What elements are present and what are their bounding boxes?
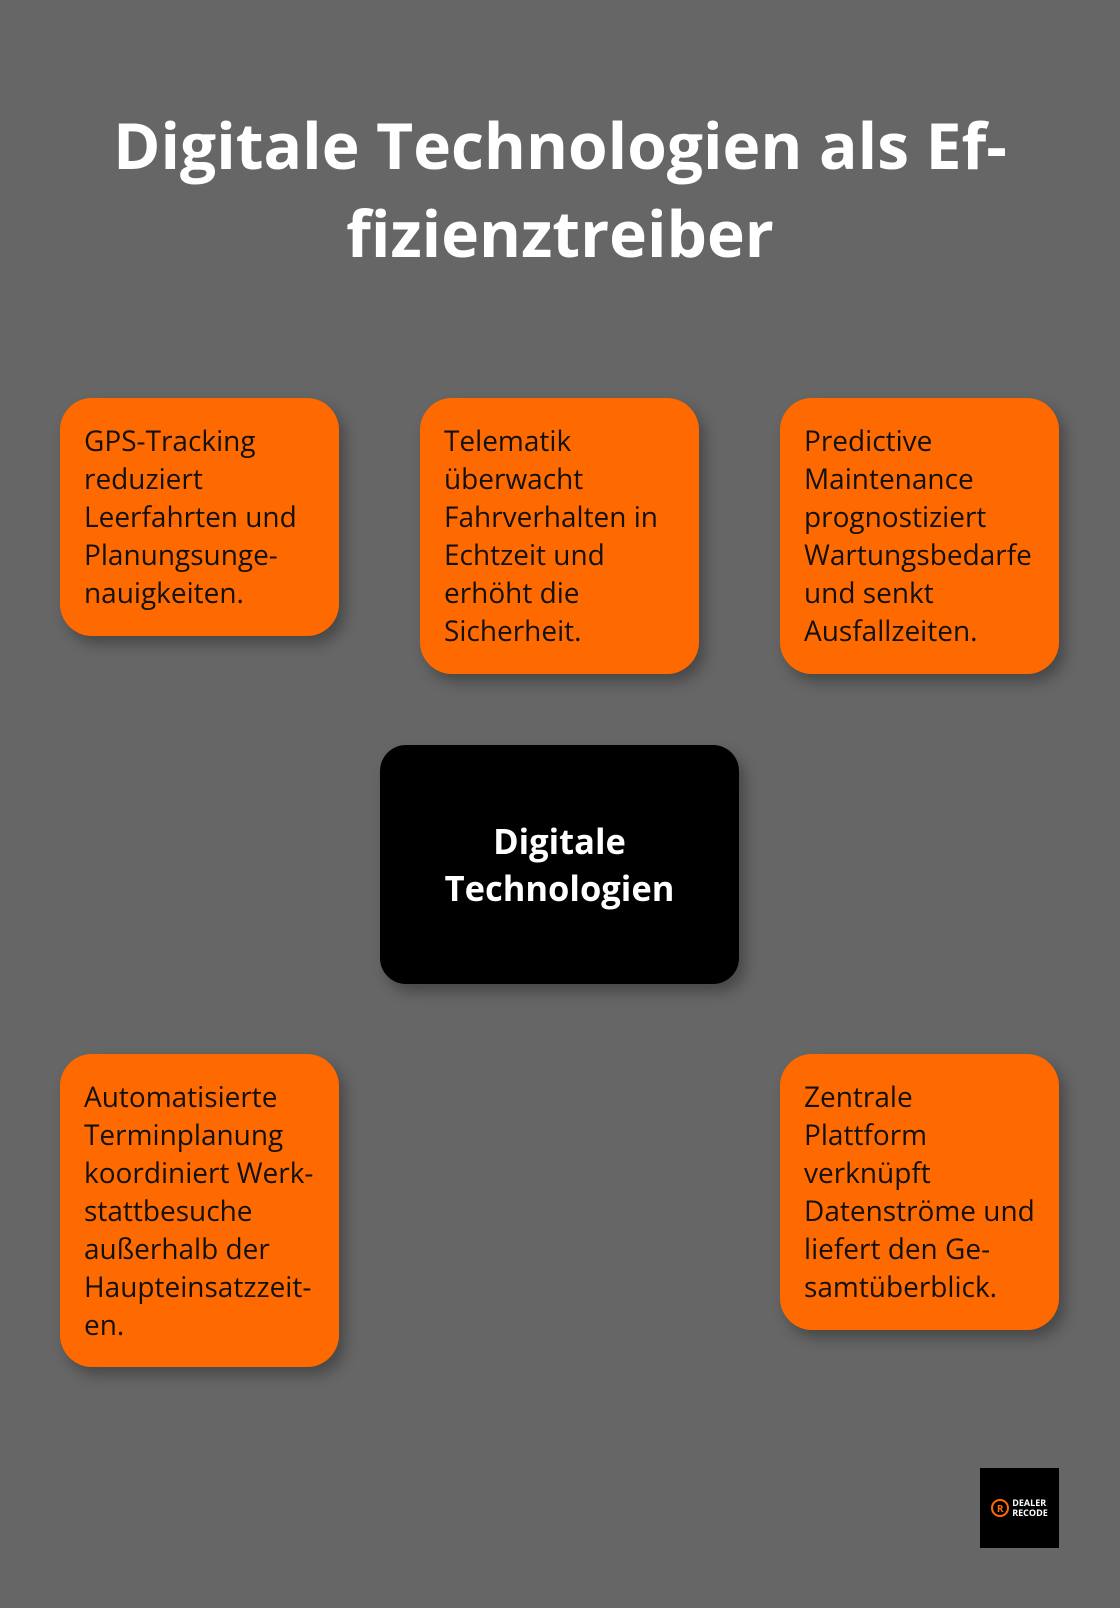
panel: Terminplanung: außerhalb der: [84, 1230, 270, 1268]
panel: Zentrale Plattform: samtüberblick.: [804, 1268, 997, 1306]
center hub: [380, 745, 739, 984]
center hub: Technologien: [445, 864, 674, 912]
panel: Telematik: Telematik: [444, 422, 571, 460]
panel: Terminplanung: stattbesuche: [84, 1192, 253, 1230]
panel: Terminplanung: Terminplanung: [84, 1116, 283, 1154]
panel: Predictive Maintenance: [780, 398, 1059, 674]
panel: Telematik: erhöht die: [444, 574, 580, 612]
logo: RECODE: [1012, 1506, 1048, 1519]
panel: Zentrale Plattform: [780, 1054, 1059, 1330]
panel: GPS-Tracking: reduziert: [84, 460, 203, 498]
panel: Zentrale Plattform: Plattform: [804, 1116, 927, 1154]
panel: Telematik: überwacht: [444, 460, 583, 498]
panel: Zentrale Plattform: Zentrale: [804, 1078, 913, 1116]
panel: Zentrale Plattform: Datenströme und: [804, 1192, 1035, 1230]
panel: Predictive Maintenance: prognostiziert: [804, 498, 986, 536]
panel: Zentrale Plattform: verknüpft: [804, 1154, 931, 1192]
title: fizienztreiber: [346, 189, 774, 276]
panel: Terminplanung: Haupteinsatzzeit-: [84, 1268, 311, 1306]
title: Digitale Technologien als Ef-: [113, 101, 1007, 188]
panel: Terminplanung: koordiniert Werk-: [84, 1154, 313, 1192]
panel: GPS-Tracking: Planungsunge-: [84, 536, 278, 574]
title: [113, 101, 1007, 276]
panel: GPS-Tracking: Leerfahrten und: [84, 498, 297, 536]
panel: Predictive Maintenance: Wartungsbedarfe: [804, 536, 1032, 574]
panel: GPS-Tracking: nauigkeiten.: [84, 574, 244, 612]
panel: Telematik: Sicherheit.: [444, 612, 581, 650]
panel: Telematik: Fahrverhalten in: [444, 498, 658, 536]
panel: Terminplanung: Automatisierte: [84, 1078, 278, 1116]
panel: Terminplanung: en.: [84, 1306, 124, 1344]
panel: Telematik: Echtzeit und: [444, 536, 605, 574]
panel: Predictive Maintenance: und senkt: [804, 574, 934, 612]
panel: GPS-Tracking: [60, 398, 339, 636]
panel: Telematik: [420, 398, 699, 674]
panel: Predictive Maintenance: Ausfallzeiten.: [804, 612, 977, 650]
panel: Predictive Maintenance: Maintenance: [804, 460, 974, 498]
logo: R: [997, 1501, 1004, 1515]
panel: Terminplanung: [60, 1054, 339, 1367]
panel: GPS-Tracking: GPS-Tracking: [84, 422, 256, 460]
center hub: Digitale: [493, 818, 626, 864]
logo: [980, 1468, 1059, 1548]
logo: DEALER: [1012, 1496, 1046, 1509]
panel: Predictive Maintenance: Predictive: [804, 422, 932, 460]
panel: Zentrale Plattform: liefert den Ge-: [804, 1230, 990, 1268]
